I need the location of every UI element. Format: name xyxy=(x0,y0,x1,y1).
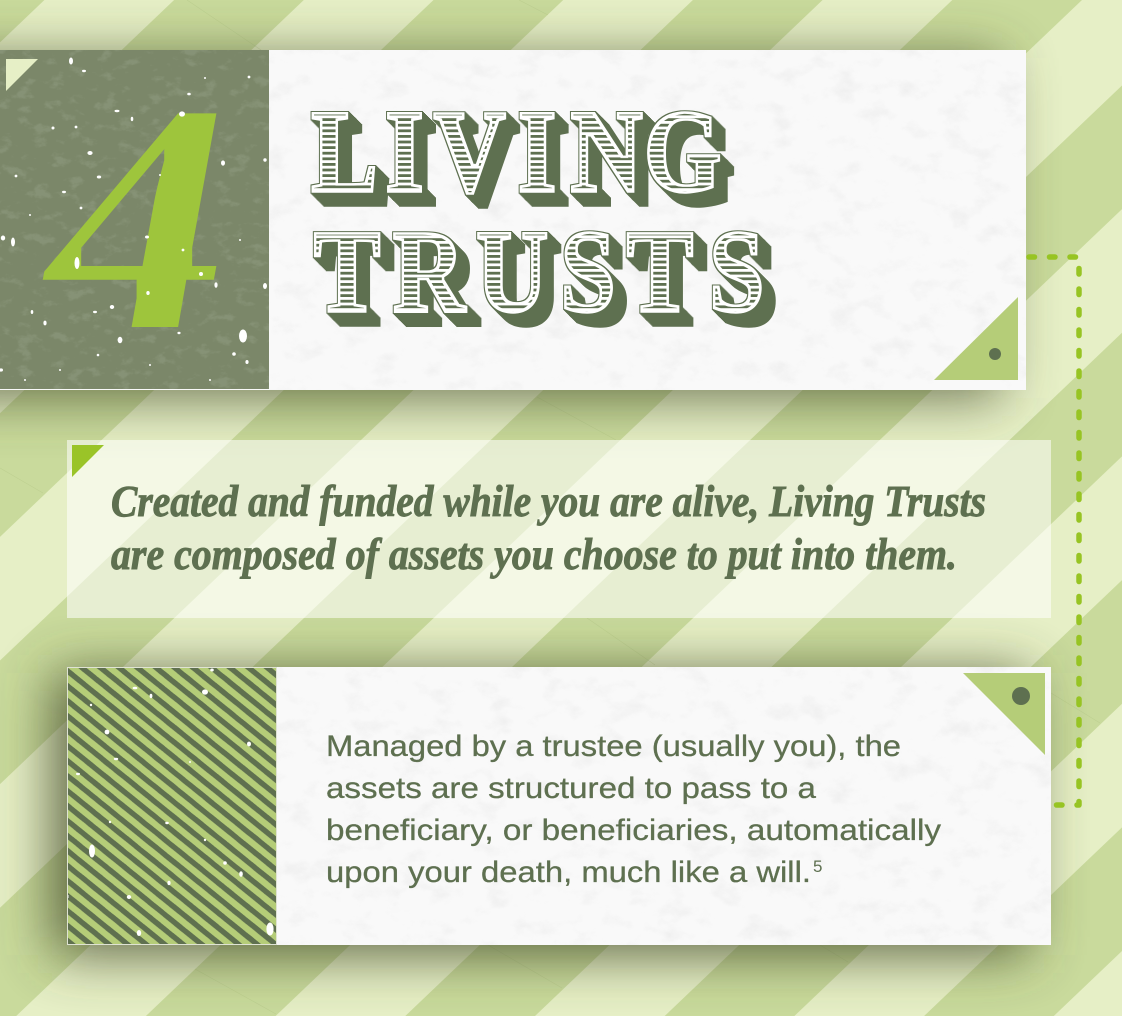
panel: definition xyxy=(67,440,1051,618)
shadow: header card xyxy=(0,58,1002,398)
header paper xyxy=(0,50,1026,390)
panel: header card xyxy=(0,22,1026,412)
explanation text: 5 xyxy=(813,857,822,876)
title: TRUSTS xyxy=(314,205,765,337)
number 4: 4 xyxy=(42,22,228,412)
panel corner triangle xyxy=(72,445,104,477)
definition text: are composed of assets you choose to put into them. xyxy=(111,530,957,579)
number tile xyxy=(0,22,269,412)
speckles xyxy=(0,58,267,381)
title xyxy=(311,85,765,337)
shadow: body card xyxy=(52,673,1030,955)
definition text: Created and funded while you are alive, Living Trusts xyxy=(111,477,986,526)
connector: dotted line xyxy=(1029,257,1079,805)
tile corner triangle xyxy=(6,59,38,91)
explanation text: upon your death, much like a will. xyxy=(326,856,811,889)
definition text xyxy=(111,477,986,579)
corner triangle with dot xyxy=(963,673,1045,755)
panel: explanation card xyxy=(67,667,1051,945)
explanation text: beneficiary, or beneficiaries, automatically xyxy=(326,814,941,847)
title: LIVING xyxy=(311,85,721,217)
explanation paper xyxy=(67,667,1051,945)
explanation text: Managed by a trustee (usually you), the xyxy=(326,730,901,763)
explanation text: assets are structured to pass to a xyxy=(326,772,816,805)
explanation text xyxy=(326,730,941,889)
striped tile xyxy=(68,668,276,944)
corner triangle with dot xyxy=(934,297,1018,380)
